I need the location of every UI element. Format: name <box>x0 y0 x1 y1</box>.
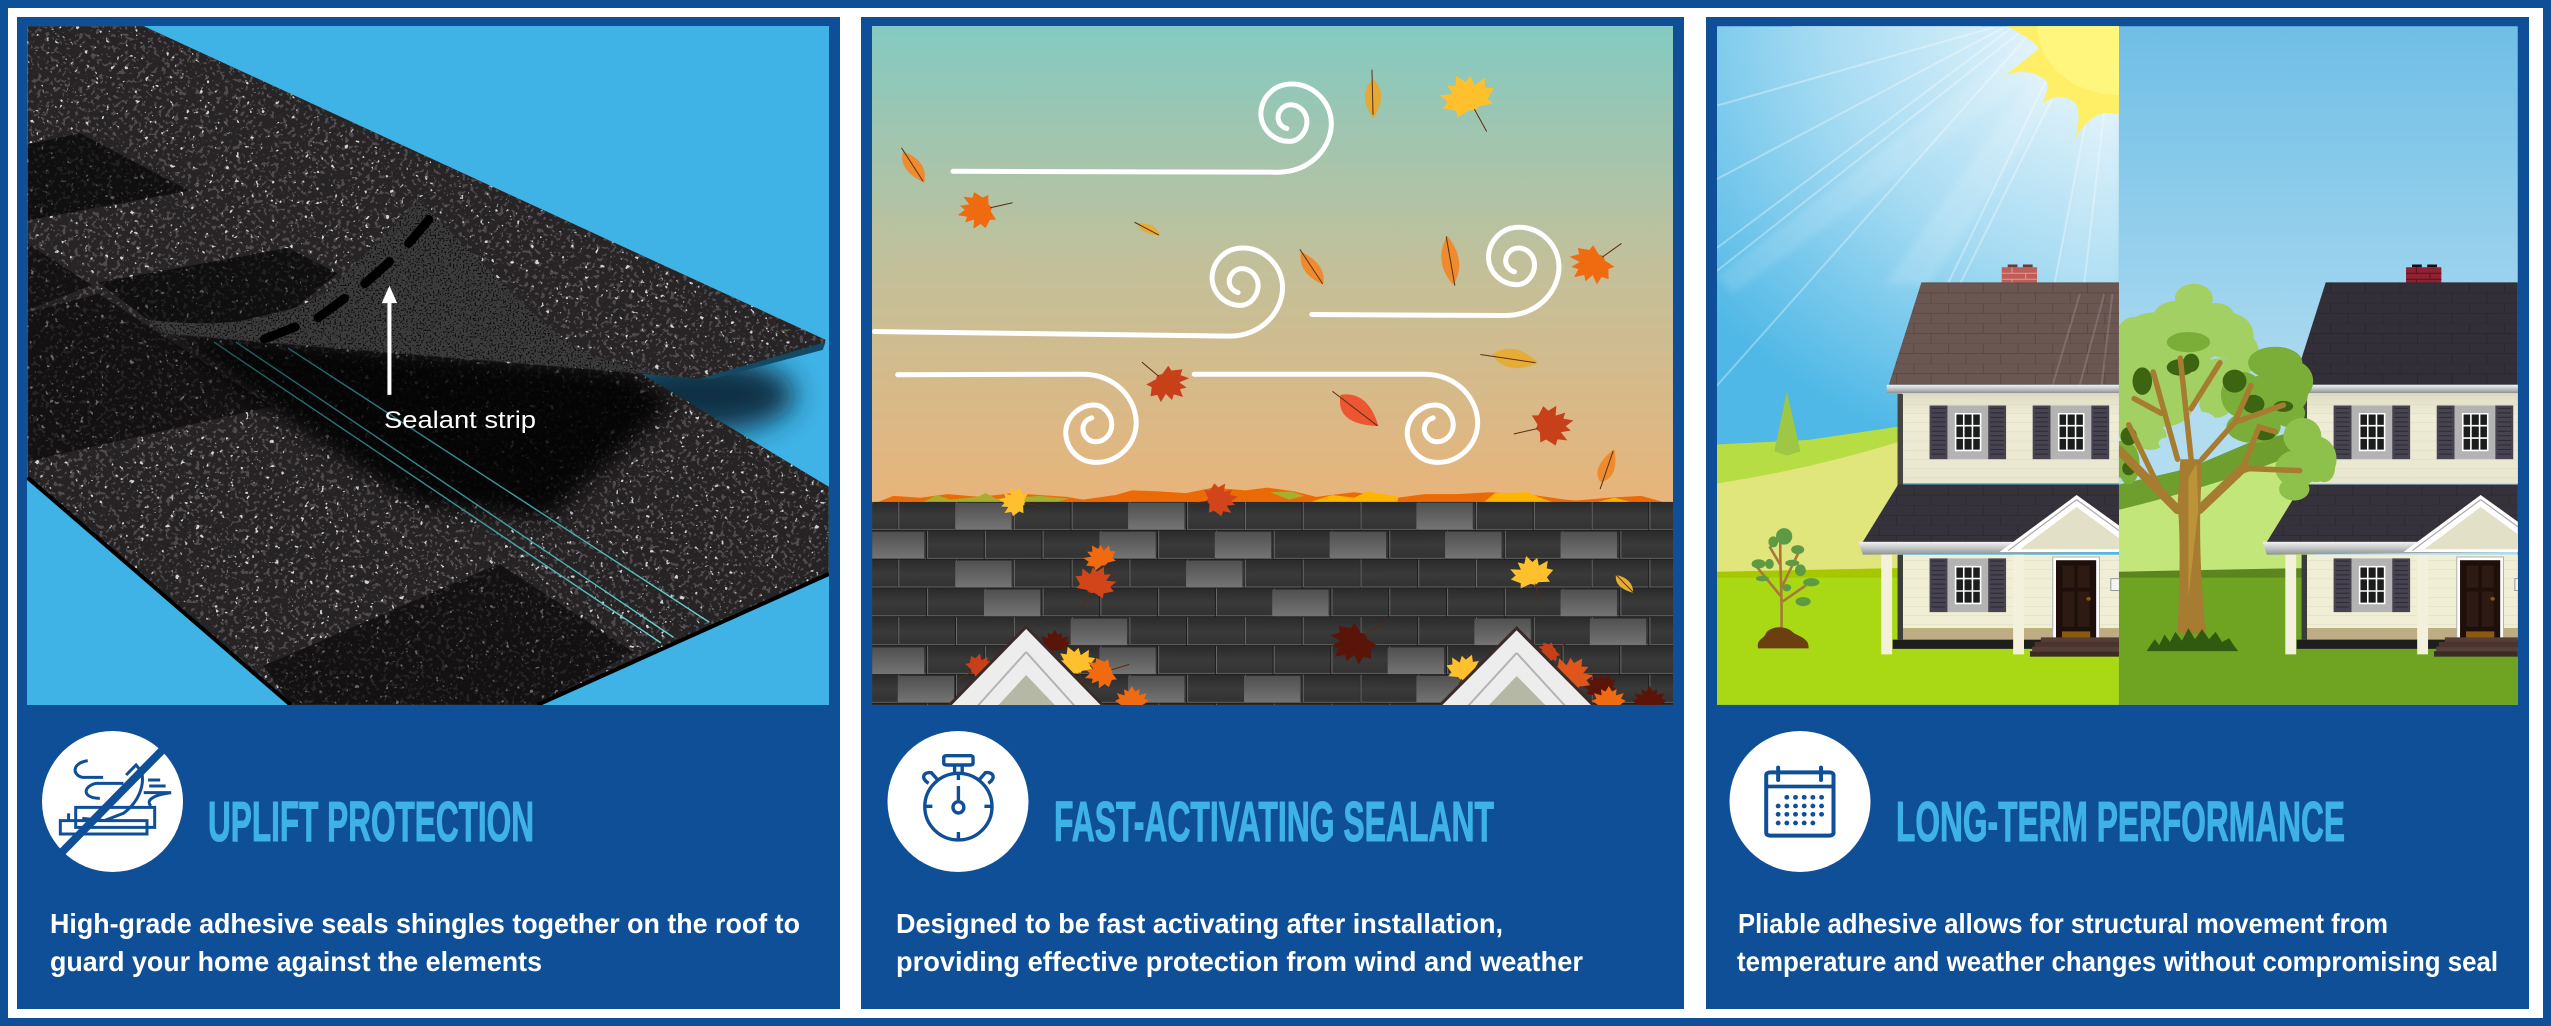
hills <box>1717 391 2119 706</box>
text block: performance description: temperature and weather changes without compromising seal <box>1737 946 2498 977</box>
sapling <box>1752 528 1819 648</box>
panel: uplift protection <box>17 17 840 1009</box>
panel: fast-activating sealant <box>861 17 1684 1009</box>
leaf pile on ridge <box>878 488 1663 502</box>
panel: long-term performance <box>1706 0 2551 1009</box>
heading: uplift protection: UPLIFT PROTECTION <box>208 790 534 854</box>
sun <box>2006 26 2119 140</box>
maple leaves <box>952 66 1637 673</box>
dormers <box>948 627 1595 707</box>
panel 3 background <box>1706 17 2529 1009</box>
roof shingles <box>872 502 1674 706</box>
leaves behind dormers <box>949 630 1666 723</box>
text block: performance description: Pliable adhesive allows for structural movement from <box>1738 908 2388 939</box>
panel 2 background <box>861 17 1684 1009</box>
icon: calendar <box>1730 731 1870 872</box>
house new roof <box>1888 264 2119 385</box>
illustration: shingle with sealant strip <box>27 26 829 705</box>
text block: uplift description <box>50 908 800 977</box>
panel 1 background <box>17 17 840 1009</box>
house new body <box>1858 384 2119 657</box>
heading: fast-activating sealant: FAST-ACTIVATING SEALANT <box>1054 790 1494 854</box>
oval leaves <box>901 70 1633 593</box>
label: sealant strip: Sealant strip <box>384 407 536 434</box>
icon: no uplift <box>42 731 183 872</box>
text block: uplift description: guard your home against the elements <box>50 946 542 977</box>
illustration: wind and leaves over roof <box>872 26 1674 723</box>
hills aged <box>2119 427 2518 706</box>
wind swirls <box>874 84 1559 462</box>
aged house side <box>2118 26 2518 705</box>
text block: performance description <box>1737 908 2498 977</box>
text block: sealant description: providing effective protection from wind and weather <box>896 946 1583 977</box>
text block: sealant description: Designed to be fast activating after installation, <box>896 908 1503 939</box>
sun rays <box>1717 26 2119 386</box>
text block: sealant description <box>896 908 1583 977</box>
new house side <box>1717 26 2119 705</box>
text block: uplift description: High-grade adhesive seals shingles together on the roof to <box>50 908 800 939</box>
arrow: to sealant strip <box>382 286 397 395</box>
icon: stopwatch <box>888 731 1028 872</box>
house aged body <box>2262 384 2518 657</box>
mature tree <box>2107 284 2337 651</box>
illustration: house new and aged <box>1717 0 2551 706</box>
house aged roof <box>2293 264 2518 385</box>
sealant dashes <box>264 219 429 339</box>
